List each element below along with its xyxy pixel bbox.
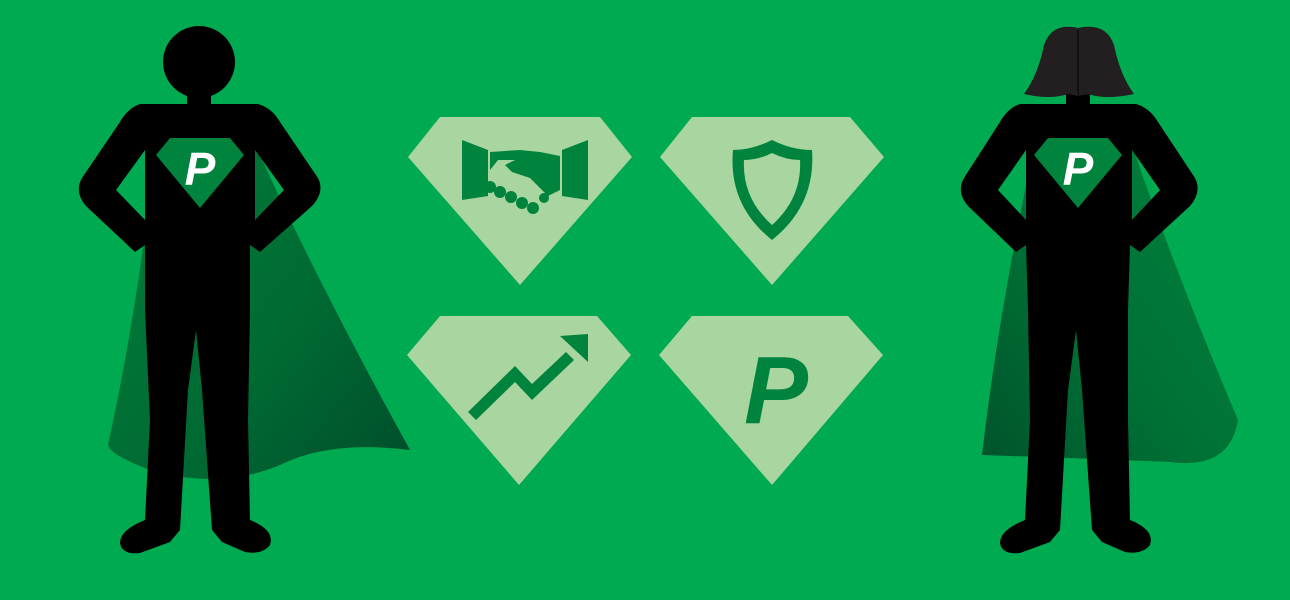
icon: shield [732,140,812,240]
diamond: shield [660,117,884,285]
icon: trend arrow [468,334,588,420]
diamond: growth arrow [407,316,631,485]
hero: male [79,26,410,553]
hero: female [961,27,1238,553]
chest emblem: P [1063,143,1094,195]
icon: handshake [462,140,588,214]
chest emblem [1034,138,1122,208]
diamond: handshake [408,117,632,285]
chest emblem [156,138,244,208]
diamond: P logo [659,316,883,485]
chest emblem: P [185,143,216,195]
icon: P letter: P [744,337,809,444]
